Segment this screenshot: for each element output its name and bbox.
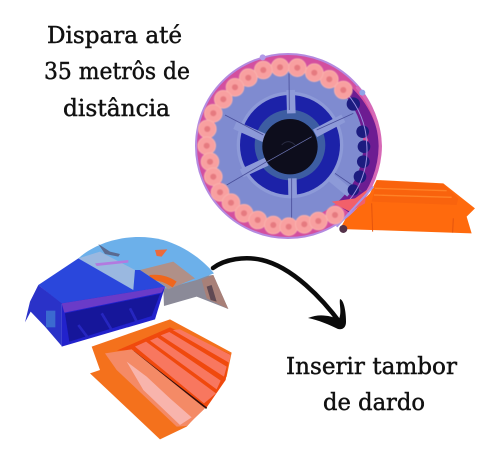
magazine glossy face [105,349,205,427]
blaster light blue body [78,237,214,290]
drum blue windows [237,92,343,198]
image: orange magazine close-up [90,319,232,439]
heading: shooting distance [44,23,190,122]
blaster dark box opening [65,294,160,342]
blaster box front [62,287,165,347]
blaster blue top [38,258,165,304]
caption: insert dart drum: de dardo [323,390,425,416]
magazine red base [117,327,230,408]
arrow [213,258,346,329]
heading: shooting distance: 35 metrôs de [44,59,190,85]
drum outer rim [196,54,380,238]
drum darts [198,59,352,236]
image: blue blaster magazine well [25,237,228,347]
drum right scallops [347,97,370,196]
blaster grey body edge [163,275,228,309]
image: orange magazine behind drum [340,180,475,233]
magazine slats [135,342,216,403]
blaster left side [25,285,62,346]
drum spokes [235,90,350,197]
drum orange/pink latch [332,190,367,212]
heading: shooting distance: distância [63,96,170,122]
heading: shooting distance: Dispara até [47,23,182,49]
drum dart holes [204,64,346,230]
image: dart drum [196,54,380,238]
drum centre hub [262,119,318,174]
caption: insert dart drum: Inserir tambor [286,354,457,380]
blaster socket [140,262,195,289]
blaster front lip [62,287,165,313]
caption: insert dart drum [286,354,457,416]
drum inner disc [211,69,363,221]
